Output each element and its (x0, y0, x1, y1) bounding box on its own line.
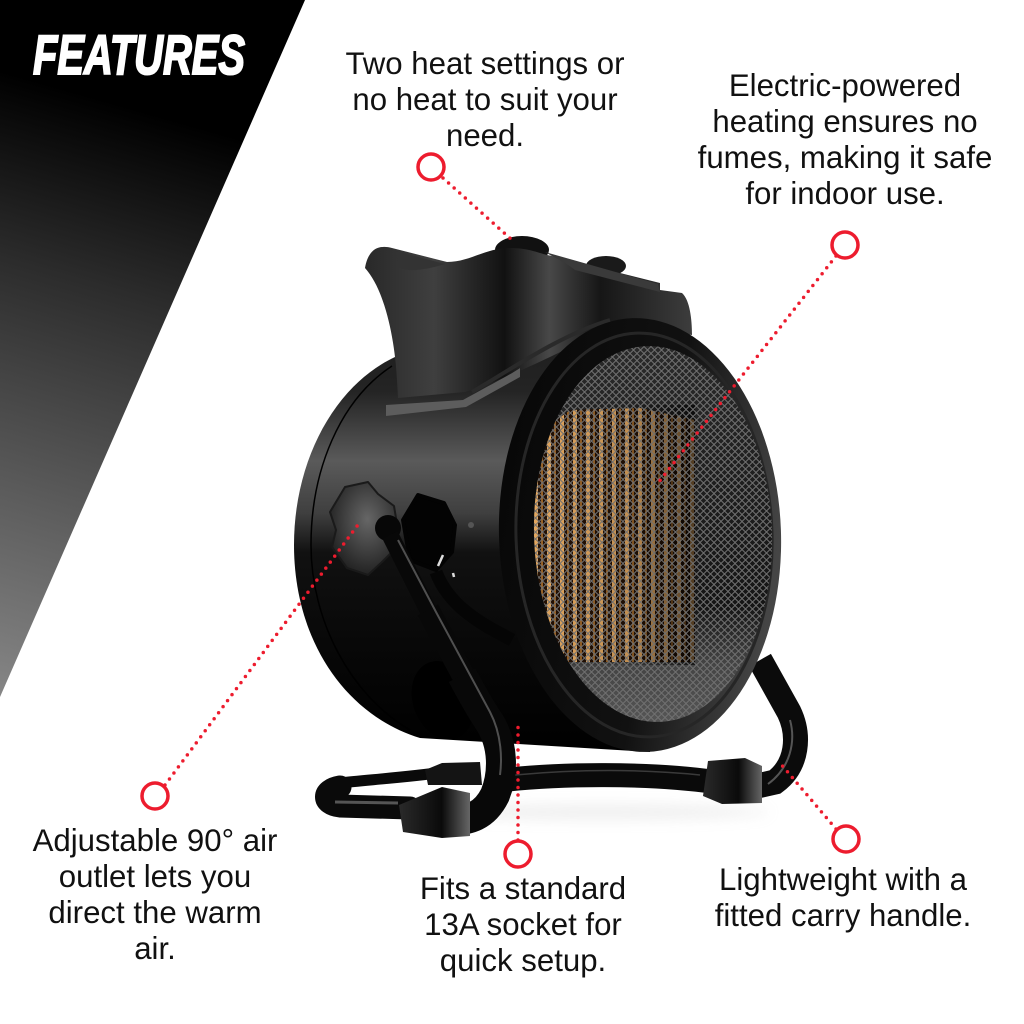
ring bevel (509, 329, 779, 741)
caption: Adjustable 90° air (33, 823, 277, 858)
top knobs (495, 236, 549, 264)
adjustment knob: inner (403, 495, 455, 570)
callout: adjustable outlet (33, 522, 360, 966)
cable clip highlights (438, 555, 454, 577)
arm highlights (398, 540, 501, 775)
stand bar highlight (515, 770, 700, 775)
handle recess (395, 251, 445, 270)
caption: quick setup. (440, 943, 606, 978)
knob hub (375, 515, 401, 541)
caption: need. (446, 118, 524, 153)
carry handle housing (365, 247, 692, 398)
front stand: left arm (390, 535, 433, 620)
product: electric fan heater (294, 236, 795, 838)
banner: diagonal gradient panel (0, 0, 305, 697)
caption: for indoor use. (745, 176, 945, 211)
callout: electric powered (658, 68, 992, 483)
right stand arm (748, 660, 795, 788)
limb highlight (335, 802, 398, 803)
leader line (516, 725, 520, 840)
rear disc seam (311, 366, 410, 730)
heading: FEATURES: FEATURES (33, 23, 245, 86)
heating element (530, 408, 695, 662)
callout: carry handle (715, 763, 971, 933)
top housing (365, 236, 692, 416)
caption: direct the warm (48, 895, 262, 930)
caption: Electric-powered (729, 68, 961, 103)
control panel (545, 252, 660, 292)
caption: air. (134, 931, 176, 966)
callout: heat settings (345, 46, 625, 240)
front ring (492, 313, 788, 757)
marker (505, 841, 531, 867)
caption: heating ensures no (712, 104, 978, 139)
adjustment knob: outer (330, 482, 398, 575)
caption: no heat to suit your (352, 82, 618, 117)
mounting plate (386, 368, 520, 416)
caption: 13A socket for (424, 907, 622, 942)
leader line (658, 256, 836, 483)
heater body (294, 318, 650, 752)
floor shadow (430, 805, 770, 819)
wire mesh (534, 346, 772, 722)
caption: fumes, making it safe (698, 140, 992, 175)
caption: Fits a standard (420, 871, 626, 906)
leader line (443, 178, 512, 240)
side strap (472, 320, 610, 392)
marker (832, 232, 858, 258)
marker (418, 154, 444, 180)
element fade (560, 405, 695, 665)
marker (833, 826, 859, 852)
air intake shadow (401, 652, 485, 748)
bracket screw (468, 522, 474, 528)
stand: upper left limb (340, 772, 445, 783)
caption: outlet lets you (59, 859, 251, 894)
callout: standard socket (420, 725, 626, 978)
cable (436, 572, 512, 640)
caption: fitted carry handle. (715, 898, 971, 933)
grille backing (528, 342, 778, 726)
leader line (165, 522, 360, 785)
stand foot sleeve: right (703, 758, 762, 804)
stand foot sleeve: front left (399, 787, 470, 838)
marker (142, 783, 168, 809)
stand foot sleeve: rear left (425, 762, 482, 785)
caption: Lightweight with a (719, 862, 968, 897)
leader line (780, 763, 836, 829)
rear stand bar (495, 775, 715, 782)
caption: Two heat settings or (345, 46, 625, 81)
stand: front left limb (326, 787, 410, 808)
